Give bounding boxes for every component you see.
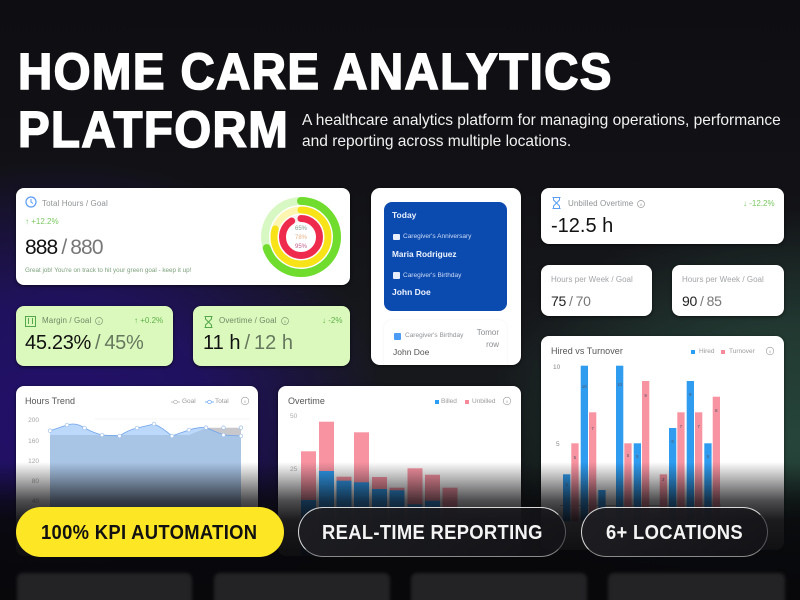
bar chart: 7 <box>680 424 683 429</box>
value: 45.23%/45% <box>25 332 143 354</box>
label: Overtime / Goal <box>219 316 277 325</box>
date: Tomor <box>477 328 499 337</box>
legend: Hired <box>699 348 715 355</box>
bar chart: 10 <box>582 384 587 389</box>
bar chart: 5 <box>556 441 560 448</box>
line chart: 120 <box>28 458 39 465</box>
line chart: 160 <box>28 438 39 445</box>
change: ↓ -12.2% <box>743 199 775 208</box>
bar chart: 2 <box>662 477 665 482</box>
panel: hours per week 1 <box>541 265 652 316</box>
legend: Unbilled <box>472 398 496 405</box>
panel: hours trend <box>16 386 258 556</box>
change: ↓ -2% <box>322 316 342 325</box>
bar chart: 5 <box>636 454 639 459</box>
legend <box>691 348 755 355</box>
bar chart: 9 <box>689 392 692 397</box>
pill: real-time reporting <box>298 507 566 557</box>
bar chart: 50 <box>290 413 298 420</box>
legend: Billed <box>441 398 457 405</box>
legend <box>171 398 229 405</box>
label: Total Hours / Goal <box>42 199 108 208</box>
line chart <box>28 417 250 507</box>
name: John Doe <box>393 347 429 357</box>
panel: hired vs turnover <box>541 336 784 550</box>
line chart: 80 <box>32 478 39 485</box>
legend: Goal <box>182 398 196 405</box>
donut chart: 78% <box>295 235 308 241</box>
panel: unbilled overtime <box>541 188 784 244</box>
bar chart: 7 <box>591 426 594 431</box>
label: Margin / Goal <box>42 316 91 325</box>
message: Great job! You're on track to hit your green goal - keep it up! <box>25 267 191 274</box>
icon: gift <box>393 272 400 279</box>
heading: Overtime <box>288 396 325 406</box>
date: row <box>486 340 499 349</box>
panel: calendar <box>371 188 521 365</box>
line chart: 200 <box>28 417 39 424</box>
bar chart <box>290 413 458 547</box>
bar chart: 8 <box>715 408 718 413</box>
subtitle <box>302 112 781 150</box>
subtitle: A healthcare analytics platform for managing operations, performance <box>302 112 781 129</box>
bottom fade overlay <box>0 462 800 600</box>
label: Hours per Week / Goal <box>682 275 764 284</box>
icon: info <box>281 317 289 325</box>
bar chart: 10 <box>553 364 561 371</box>
birthday label: Caregiver's Birthday <box>405 332 463 339</box>
donut chart: 65% <box>295 226 308 232</box>
anniversary label: Caregiver's Anniversary <box>403 233 471 240</box>
pill: kpi automation <box>16 507 284 557</box>
label: Unbilled Overtime <box>568 199 633 208</box>
panel: overtime goal <box>193 306 350 366</box>
title: HOME CARE ANALYTICS <box>18 43 613 100</box>
bar chart: 7 <box>697 424 700 429</box>
line chart: 40 <box>32 498 39 505</box>
icon: gift <box>394 333 401 340</box>
legend: Turnover <box>729 348 755 355</box>
change: ↑ +0.2% <box>134 316 163 325</box>
icon: info <box>240 396 250 406</box>
value: 11 h/12 h <box>203 332 293 354</box>
bar chart <box>553 364 721 522</box>
blurred lower cards <box>16 572 786 600</box>
label: Hours per Week / Goal <box>551 275 633 284</box>
donut chart <box>261 197 341 277</box>
legend <box>435 398 496 405</box>
icon: info <box>502 396 512 406</box>
bar chart: 5 <box>707 454 710 459</box>
bar chart: 6 <box>671 439 674 444</box>
heading: Hired vs Turnover <box>551 346 623 356</box>
icon: margin <box>25 316 36 327</box>
panel: margin <box>16 306 173 366</box>
icon: clock <box>25 196 37 208</box>
bar chart: 2 <box>565 482 568 487</box>
pill: locations <box>581 507 768 557</box>
bar chart: 5 <box>627 453 630 458</box>
heading: Today <box>392 210 416 220</box>
name: Maria Rodriguez <box>392 249 457 259</box>
panel: hours per week 2 <box>672 265 784 316</box>
panel: total hours <box>16 188 350 285</box>
icon: calendar <box>393 234 400 240</box>
heading: Hours Trend <box>25 396 75 406</box>
bar chart: 5 <box>574 455 577 460</box>
icon: hourglass <box>552 197 560 209</box>
bar chart: 10 <box>617 382 623 387</box>
bar chart: 25 <box>290 466 298 473</box>
change: ↑ +12.2% <box>25 217 59 226</box>
title: PLATFORM <box>18 101 289 158</box>
value: 90/85 <box>682 293 722 309</box>
value: 888/880 <box>25 236 103 259</box>
icon: info <box>637 200 645 208</box>
icon: info <box>766 346 774 356</box>
pill: locations: 6+ LOCATIONS <box>606 522 743 544</box>
legend: Total <box>215 398 229 405</box>
pill: kpi automation: 100% KPI AUTOMATION <box>41 522 257 544</box>
bar chart: 9 <box>644 393 647 398</box>
value: 75/70 <box>551 293 591 309</box>
date <box>476 328 499 349</box>
icon: hourglass <box>204 316 212 328</box>
panel: overtime chart <box>278 386 521 556</box>
birthday label: Caregiver's Birthday <box>403 272 461 279</box>
title <box>18 43 613 158</box>
pill: real-time reporting: REAL-TIME REPORTING <box>322 522 543 544</box>
value: -12.5 h <box>551 215 613 237</box>
icon: info <box>95 317 103 325</box>
tomorrow box <box>384 320 507 380</box>
name: John Doe <box>392 287 431 297</box>
subtitle: and reporting across multiple locations. <box>302 133 571 150</box>
today box <box>384 202 507 311</box>
donut chart: 95% <box>295 244 308 250</box>
